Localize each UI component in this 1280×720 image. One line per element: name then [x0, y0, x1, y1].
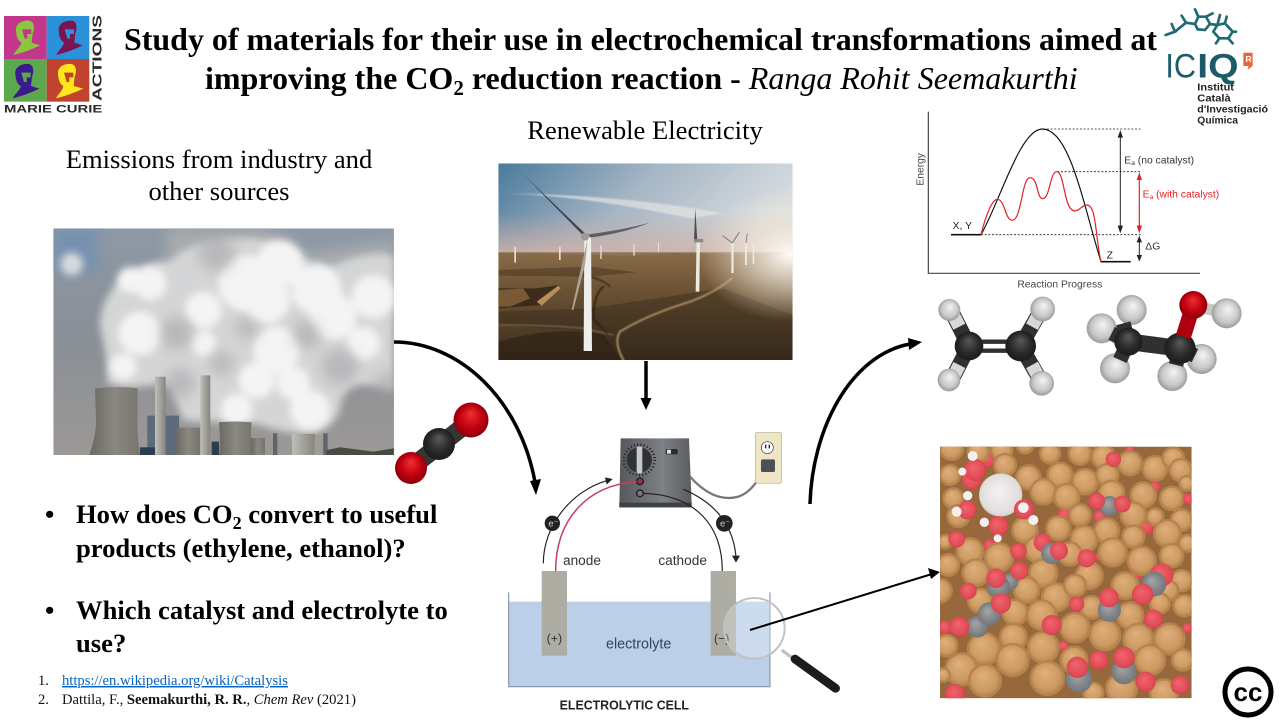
sub: labels — [547, 553, 729, 712]
sub: energy arrows and labels: E — [1143, 189, 1150, 200]
heading: emissions — [66, 144, 372, 206]
sub: energy arrows and labels: Z — [1107, 250, 1113, 261]
logo: ICIQ: Química — [1197, 116, 1238, 127]
sub: axis labels: Reaction Progress — [1017, 280, 1102, 291]
icon: Creative Commons: cc — [1234, 677, 1262, 707]
bullet list: research questions: How does CO — [76, 499, 233, 529]
sub: electron badges — [545, 515, 733, 532]
sub: electrolyte tank — [509, 592, 770, 687]
sub: energy arrows and labels: a — [1131, 160, 1135, 167]
sub: wall outlet and cable — [690, 432, 782, 498]
sub: labels: cathode — [658, 553, 707, 568]
arrow: magnifier to catalyst surface — [750, 568, 940, 630]
chart: reaction energy diagram — [915, 112, 1219, 291]
sub: dotted guides — [981, 129, 1142, 235]
bullet list: research questions: Which catalyst and electrolyte to — [76, 595, 448, 625]
sub: energy arrows and labels: E — [1124, 155, 1131, 166]
icon: CO2 molecule — [395, 402, 488, 484]
sub: ethylene model — [938, 297, 1055, 396]
bullet list: research questions: • — [45, 595, 54, 625]
sub: labels: ELECTROLYTIC CELL — [560, 698, 689, 712]
sub: wires and electron arrows — [543, 477, 740, 571]
sub: labels: electrolyte — [606, 637, 671, 653]
bullet list: research questions: • — [45, 499, 54, 529]
sub: anode electrode — [542, 571, 567, 656]
arrow: cell to products — [810, 338, 922, 504]
diagram: electrolytic cell — [509, 432, 836, 712]
arrow: emissions to cell — [394, 342, 541, 495]
sub: turbines — [514, 174, 754, 351]
logo: ICIQ: R — [1245, 54, 1252, 64]
sub: labels: (−) — [714, 632, 729, 646]
references: 1. — [38, 673, 49, 689]
logo: Marie Curie Actions — [4, 15, 105, 115]
sub: electron badges: e⁻ — [720, 519, 730, 529]
sub: power supply — [619, 438, 692, 507]
sub: magnifying glass — [724, 598, 836, 688]
logo: ICIQ: Català — [1197, 94, 1231, 105]
sub: hydrated cation cluster — [952, 451, 1038, 542]
sub: energy arrows and labels: a — [1150, 194, 1154, 201]
sub: uncatalysed curve — [951, 129, 1131, 262]
photo: power plant emissions — [53, 228, 398, 456]
references: 2. — [38, 692, 49, 708]
image: catalyst surface with adsorbed CO2 — [940, 446, 1192, 698]
heading: emissions: other sources — [148, 176, 290, 206]
logo: Marie Curie Actions: ACTIONS — [91, 15, 105, 101]
sub: surface oxygen atoms — [938, 452, 1193, 704]
icon: molecule rings — [1166, 9, 1236, 43]
sub: chimneys and towers — [89, 375, 394, 456]
sub: adsorbed CO2 molecules — [949, 493, 1173, 693]
bullet list: research questions: use? — [76, 628, 126, 658]
sub: electron badges: e⁻ — [548, 519, 559, 529]
logo: ICIQ: IQ — [1197, 47, 1239, 85]
sub: energy arrows and labels: (no catalyst) — [1135, 155, 1194, 166]
sub: axes — [928, 112, 1200, 273]
sub: axis labels: Energy — [915, 152, 926, 186]
title: improving the CO — [205, 60, 453, 96]
references: Dattila, F., Seemakurthi, R. R., Chem Rev (2021) — [62, 692, 356, 708]
heading: renewable electricity: Renewable Electricity — [527, 115, 763, 145]
molecules: ethylene and ethanol — [938, 291, 1242, 396]
sub: labels: anode — [563, 553, 601, 568]
logo: ICIQ — [1165, 9, 1271, 127]
sub: copper spheres — [940, 446, 1192, 698]
bullet list: research questions: products (ethylene, ethanol)? — [76, 533, 406, 563]
references — [38, 673, 356, 708]
logo: Marie Curie Actions: MARIE CURIE — [4, 103, 102, 115]
references: https://en.wikipedia.org/wiki/Catalysis — [62, 673, 288, 689]
sub: energy arrows and labels: (with catalyst) — [1153, 189, 1219, 200]
sub: ethanol model — [1087, 291, 1242, 391]
sub: catalysed curve — [981, 172, 1101, 262]
sub: energy arrows and labels — [953, 130, 1219, 262]
bullet list: research questions: convert to useful — [242, 499, 437, 529]
logo: ICIQ: Institut — [1197, 83, 1235, 94]
title — [124, 21, 1157, 100]
logo: ICIQ: IC — [1165, 47, 1196, 85]
bullet list: research questions: 2 — [233, 513, 242, 533]
title: 2 — [453, 76, 464, 100]
sub: axis labels — [915, 152, 1102, 291]
logo: ICIQ: d'Investigació — [1197, 105, 1268, 116]
sub: energy arrows and labels: ΔG — [1145, 241, 1160, 252]
icon: Creative Commons — [1225, 669, 1271, 715]
sub: buried oxygen atoms — [981, 445, 1192, 651]
photo: wind farm — [498, 163, 793, 360]
sub: labels: (+) — [547, 632, 562, 646]
bullet list: research questions — [45, 499, 448, 658]
title: reduction reaction - — [464, 60, 749, 96]
sub: energy arrows and labels: X, Y — [953, 221, 972, 232]
heading: emissions: Emissions from industry and — [66, 144, 372, 174]
title: Study of materials for their use in electrochemical transformations aimed at — [124, 21, 1157, 57]
sub: cathode electrode — [711, 571, 736, 656]
arrow: renewable electricity to cell — [640, 361, 652, 410]
title: Ranga Rohit Seemakurthi — [748, 60, 1078, 96]
